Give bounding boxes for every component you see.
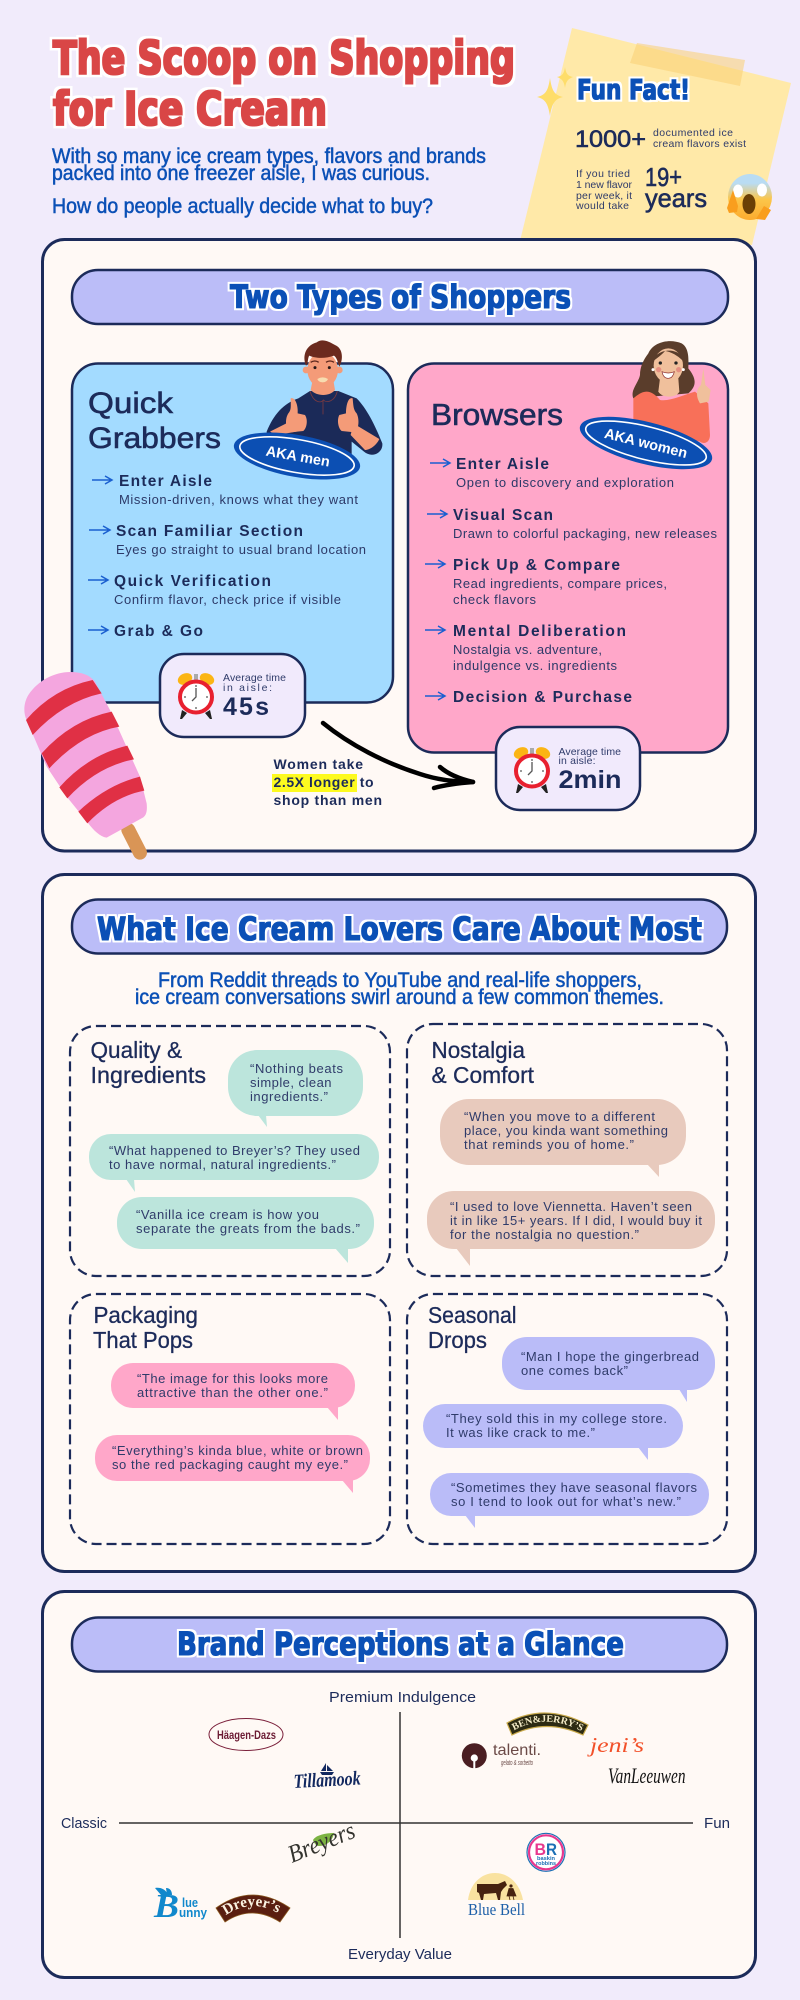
icon: sparkles <box>537 67 573 116</box>
tape <box>630 43 745 86</box>
theme heading: Packaging <box>94 1302 198 1328</box>
theme box: packaging that pops <box>70 1294 390 1544</box>
step: enter aisle <box>92 473 358 507</box>
stat: 1000+ flavors: 1000+ <box>575 126 646 153</box>
callout: women take 2.5x longer <box>272 756 382 808</box>
logo: talenti: gelato & sorbetto <box>501 1760 533 1767</box>
logo: blue bell <box>468 1873 525 1919</box>
fun fact heading: Fun Fact! <box>577 73 690 106</box>
stat: 19+ years: If you tried <box>576 168 630 180</box>
title <box>53 31 515 136</box>
step: mental deliberation: Nostalgia vs. adventure, <box>453 642 602 657</box>
quote bubble <box>430 1473 709 1528</box>
step: pick up and compare: Read ingredients, compare prices, <box>453 576 667 591</box>
theme heading <box>428 1302 516 1353</box>
time label: 2min <box>558 766 622 794</box>
card: browsers <box>408 364 728 752</box>
logo: breyers: Breyers <box>284 1817 359 1869</box>
title: The Scoop on Shopping <box>53 31 515 85</box>
quote bubble <box>111 1363 355 1420</box>
theme heading: Quality & <box>90 1037 182 1063</box>
quote bubble: separate the greats from the bads.” <box>136 1221 360 1236</box>
stat: 1000+ flavors: documented ice <box>653 127 733 139</box>
step: decision and purchase: Decision & Purchase <box>453 689 632 706</box>
section intro text: From Reddit threads to YouTube and real-life shoppers, <box>158 969 642 992</box>
logo: haagen-dazs <box>209 1718 283 1750</box>
quote bubble: “Vanilla ice cream is how you <box>136 1207 319 1222</box>
step: enter aisle: Mission-driven, knows what they want <box>119 492 358 507</box>
logo: tillamook: Tillamook <box>293 1768 361 1793</box>
panel: what ice cream lovers care about <box>42 874 756 1572</box>
time label: Average time <box>223 672 286 684</box>
badge: aka women <box>575 406 717 480</box>
intro text: How do people actually decide what to buy? <box>52 195 433 218</box>
intro text: packed into one freezer aisle, I was curious. <box>52 162 430 185</box>
card title: browsers: Browsers <box>431 397 563 432</box>
quote bubble: attractive than the other one.” <box>137 1385 328 1400</box>
card title: quick grabbers: Grabbers <box>88 422 221 455</box>
step: enter aisle: Enter Aisle <box>119 473 212 490</box>
time label <box>223 672 286 721</box>
step: mental deliberation: indulgence vs. ingredients <box>453 658 618 673</box>
time label: Average time <box>558 746 621 758</box>
step: scan familiar section <box>89 523 366 557</box>
step: enter aisle: Enter Aisle <box>456 456 549 473</box>
arrow: quick grabbers to browsers <box>323 723 473 788</box>
theme box: seasonal drops <box>407 1294 727 1544</box>
logo: blue bell: Blue Bell <box>468 1900 525 1919</box>
stat: 19+ years: would take <box>575 200 629 212</box>
quote bubble <box>117 1197 374 1263</box>
step: pick up and compare: check flavors <box>453 592 536 607</box>
step: quick verification: Confirm flavor, check price if visible <box>114 592 341 607</box>
quote bubble: it in like 15+ years. If I did, I would buy it <box>450 1213 702 1228</box>
logo: dreyer's: Dreyer’s <box>221 1899 280 1915</box>
theme heading <box>90 1037 206 1088</box>
quote bubble: for the nostalgia no question.” <box>450 1227 639 1242</box>
axis label: everyday value: Everyday Value <box>348 1946 452 1963</box>
card title: quick grabbers <box>88 387 221 455</box>
logo: blue bunny: unny <box>179 1905 208 1920</box>
axis label: fun: Fun <box>704 1815 730 1832</box>
quote bubble: “Sometimes they have seasonal flavors <box>451 1480 698 1495</box>
fun fact sticky note <box>519 28 791 245</box>
logo: baskin robbins: baskin <box>537 1856 556 1862</box>
quote bubble: “I used to love Viennetta. Haven’t seen <box>450 1199 692 1214</box>
quote bubble: place, you kinda want something <box>464 1123 668 1138</box>
logo: haagen-dazs: Häagen-Dazs <box>217 1728 276 1742</box>
quote bubble <box>440 1099 686 1177</box>
heading pill: two types of shoppers: Two Types of Shoppers <box>230 278 571 316</box>
logo: blue bunny: B <box>153 1888 179 1925</box>
popsicle stick <box>128 830 140 853</box>
logo: baskin robbins: R <box>546 1840 557 1859</box>
step: quick verification: Quick Verification <box>114 573 271 590</box>
heading pill: two types of shoppers <box>72 270 728 324</box>
time box: browsers 2min <box>496 727 640 810</box>
time box: quick grabbers 45s <box>160 654 305 737</box>
card title: quick grabbers: Quick <box>88 387 174 420</box>
intro text: With so many ice cream types, flavors and brands <box>52 145 486 168</box>
heading pill: brand perceptions at a glance <box>72 1618 727 1672</box>
panel: brand perceptions <box>41 1590 757 1979</box>
quote bubble: It was like crack to me.” <box>446 1425 595 1440</box>
step: enter aisle <box>430 456 674 490</box>
quote bubble <box>228 1050 363 1127</box>
time label <box>558 746 622 794</box>
intro text <box>52 145 486 218</box>
step: pick up and compare: Pick Up & Compare <box>453 557 620 574</box>
theme heading: Seasonal <box>428 1302 516 1328</box>
theme heading <box>93 1302 198 1353</box>
popsicle body <box>24 672 147 838</box>
quote bubble: “What happened to Breyer’s? They used <box>109 1143 360 1158</box>
icon: screaming face <box>727 174 772 220</box>
stat: 19+ years: 1 new flavor <box>576 179 632 191</box>
icon: alarm clock <box>512 745 552 793</box>
title: for Ice Cream <box>53 82 327 136</box>
badge: aka men: AKA men <box>265 444 331 471</box>
step: scan familiar section: Eyes go straight to usual brand location <box>116 542 366 557</box>
logo: baskin robbins: B <box>534 1840 546 1859</box>
quote bubble <box>89 1134 379 1192</box>
step: mental deliberation <box>425 623 626 673</box>
icon: alarm clock <box>176 671 216 719</box>
theme heading: & Comfort <box>432 1062 535 1088</box>
theme heading: Ingredients <box>90 1062 206 1088</box>
theme heading: That Pops <box>93 1327 193 1353</box>
quote bubble <box>502 1337 715 1402</box>
logo: ben and jerry's: BEN&JERRY’S <box>511 1715 584 1730</box>
stat: 19+ years <box>575 162 707 213</box>
step: grab and go: Grab & Go <box>114 623 203 640</box>
step: visual scan: Drawn to colorful packaging, new releases <box>453 526 718 541</box>
step: visual scan: Visual Scan <box>453 507 553 524</box>
quadrant chart <box>61 1689 730 1963</box>
logo: blue bunny <box>153 1888 208 1925</box>
stat: 19+ years: years <box>645 183 707 213</box>
axis label: premium indulgence: Premium Indulgence <box>329 1689 476 1706</box>
theme heading: Drops <box>428 1327 487 1353</box>
logo: baskin robbins: robbins <box>536 1861 556 1867</box>
section intro text <box>135 969 664 1009</box>
logo: talenti <box>462 1742 541 1768</box>
time label: 45s <box>223 693 269 721</box>
step: visual scan <box>427 507 718 541</box>
note paper <box>519 28 791 245</box>
chart axes <box>119 1712 693 1938</box>
popsicle stripes <box>26 680 144 823</box>
stat: 1000+ flavors: cream flavors exist <box>653 138 746 150</box>
illustration: man with thumbs up <box>267 340 382 455</box>
heading pill: what ice cream lovers care about most <box>72 900 727 954</box>
section intro text: ice cream conversations swirl around a few common themes. <box>135 986 664 1009</box>
illustration: striped popsicle <box>24 672 147 853</box>
quote bubble: to have normal, natural ingredients.” <box>109 1157 336 1172</box>
time label: in aisle: <box>558 755 596 767</box>
quote bubble: “The image for this looks more <box>137 1371 328 1386</box>
badge: aka men <box>230 424 364 488</box>
quote bubble: one comes back” <box>521 1363 628 1378</box>
step: quick verification <box>88 573 341 607</box>
logo: baskin robbins <box>527 1833 565 1871</box>
step: mental deliberation: Mental Deliberation <box>453 623 626 640</box>
time label: in aisle: <box>223 682 272 694</box>
card: quick grabbers <box>72 364 393 702</box>
axis label: classic: Classic <box>61 1815 107 1832</box>
callout: women take 2.5x longer: Women take <box>274 756 363 772</box>
logo: blue bunny: lue <box>182 1895 198 1910</box>
logo: talenti: talenti. <box>493 1742 541 1759</box>
quote bubble <box>95 1435 370 1493</box>
quote bubble: ingredients.” <box>250 1089 328 1104</box>
step: pick up and compare <box>425 557 667 607</box>
theme box: nostalgia and comfort <box>407 1024 727 1276</box>
badge: aka women: AKA women <box>603 426 689 462</box>
quote bubble: that reminds you of home.” <box>464 1137 634 1152</box>
quote bubble: “When you move to a different <box>464 1109 655 1124</box>
theme heading <box>432 1037 535 1088</box>
logo: van leeuwen: VanLeeuwen <box>608 1763 686 1788</box>
quote bubble: “Man I hope the gingerbread <box>521 1349 699 1364</box>
heading pill: brand perceptions at a glance: Brand Perceptions at a Glance <box>177 1625 624 1663</box>
step: scan familiar section: Scan Familiar Section <box>116 523 303 540</box>
stat: 19+ years: per week, it <box>576 190 632 202</box>
theme heading: Nostalgia <box>432 1037 525 1063</box>
panel: two types of shoppers <box>42 240 756 851</box>
quote bubble: “Everything’s kinda blue, white or brown <box>112 1443 363 1458</box>
quote bubble <box>423 1404 683 1460</box>
quote bubble: “They sold this in my college store. <box>446 1411 667 1426</box>
quote bubble <box>427 1191 715 1266</box>
step: enter aisle: Open to discovery and exploration <box>456 475 674 490</box>
theme box: quality and ingredients <box>70 1026 390 1276</box>
callout: women take 2.5x longer: 2.5X longer to <box>274 774 374 790</box>
quote bubble: so I tend to look out for what’s new.” <box>451 1494 681 1509</box>
illustration: woman pointing up <box>633 341 711 443</box>
logo: jeni's: jeni’s <box>586 1733 644 1757</box>
stat: 1000+ flavors <box>575 126 746 153</box>
quote bubble: simple, clean <box>250 1075 332 1090</box>
quote bubble: “Nothing beats <box>250 1061 344 1076</box>
stat: 19+ years: 19+ <box>645 162 682 192</box>
quote bubble: so the red packaging caught my eye.” <box>112 1457 348 1472</box>
callout: women take 2.5x longer: shop than men <box>274 792 382 808</box>
